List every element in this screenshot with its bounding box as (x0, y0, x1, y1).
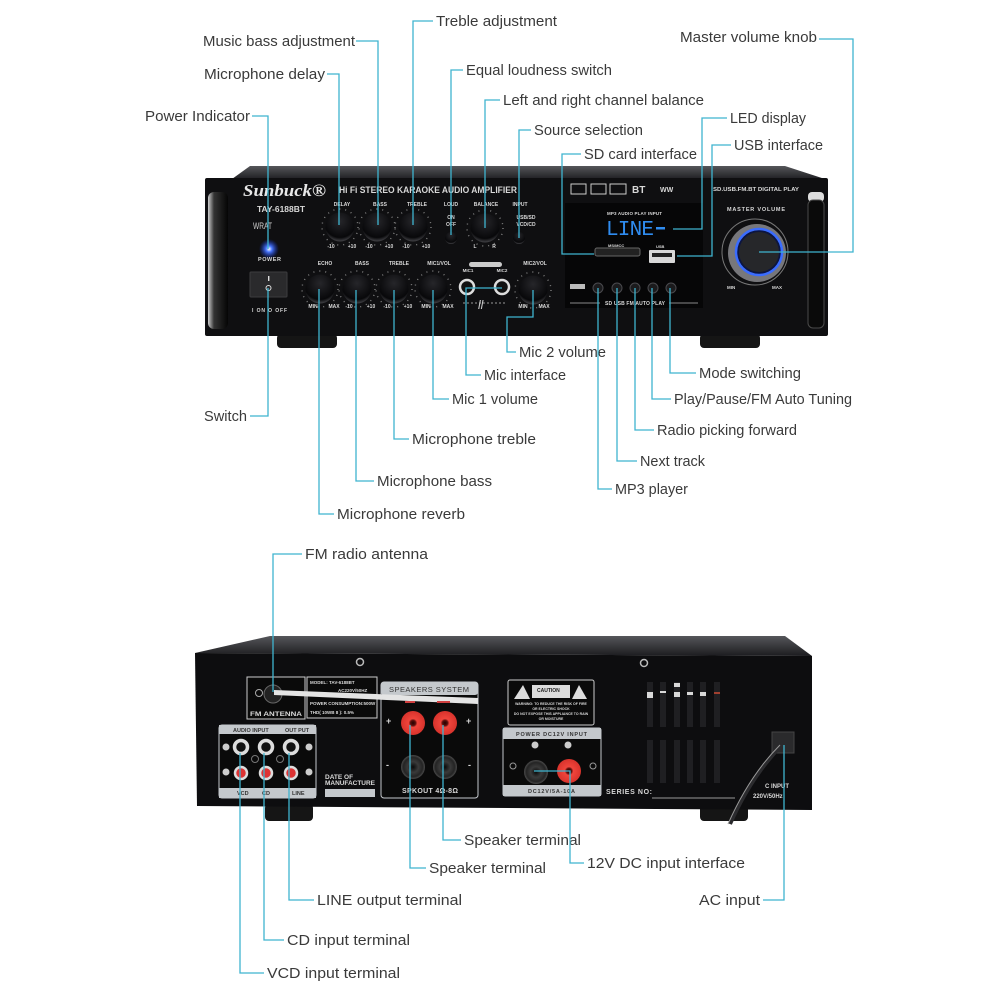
bottom row knobs: MIN (421, 304, 431, 310)
bottom row knobs: TREBLE (389, 261, 410, 267)
callout: VCD input terminal: VCD input terminal (267, 965, 400, 982)
rear face (195, 653, 812, 810)
callout: Microphone treble: Microphone treble (412, 431, 536, 448)
front face (205, 178, 828, 336)
rocker switch: I ON O OFF (252, 308, 287, 314)
SD slot: MS/MCC (608, 243, 624, 248)
media panel: MP3 AUDIO PLAY INPUT (607, 211, 662, 216)
callout: balance: Left and right channel balance (503, 92, 704, 109)
callout: LED display: LED display (730, 110, 806, 127)
feature icons: BT (632, 185, 645, 196)
date of manufacture (325, 774, 376, 797)
callout: 12V DC input interface: 12V DC input interface (587, 855, 745, 872)
callout: Speaker terminal lower: Speaker terminal (429, 860, 546, 877)
callout: Microphone delay: Microphone delay (204, 66, 326, 83)
audio input panel: AUDIO INPUT (233, 728, 269, 734)
bottom row knobs: MAX (538, 304, 550, 310)
callout: Microphone treble (394, 290, 536, 448)
media panel: SD USB FM AUTO PLAY (605, 301, 666, 307)
red terminals (401, 711, 457, 735)
specification panel (307, 677, 377, 718)
callout: Power Indicator (145, 108, 268, 249)
top row knobs: BALANCE (474, 202, 499, 208)
master volume knob: MAX (772, 285, 782, 290)
bottom row knobs (302, 261, 551, 310)
top row knobs: LOUD (444, 202, 458, 208)
callout: CD input terminal (264, 753, 410, 949)
speakers panel: SPKOUT 4Ω-8Ω (402, 788, 458, 795)
callout: Play/Pause/FM Auto Tuning (652, 288, 852, 408)
callout: Play/Pause/FM Auto Tuning: Play/Pause/FM Auto Tuning (674, 391, 852, 408)
top cover (232, 166, 828, 180)
WRAT logo: WRAT (253, 221, 272, 231)
callout: Music bass adjustment: Music bass adjustment (203, 33, 356, 50)
callout: Master volume knob: Master volume knob (680, 29, 817, 46)
callout: USB interface (677, 137, 823, 256)
callout: Speaker terminal lower (410, 725, 546, 877)
mic inputs: MIC1 (463, 268, 474, 273)
power indicator: POWER (258, 257, 281, 263)
callout: Music bass adjustment (203, 33, 378, 225)
mic inputs: ll (478, 298, 484, 312)
callout: USB interface: USB interface (734, 137, 823, 154)
antenna rod (274, 690, 478, 704)
callout: FM radio antenna: FM radio antenna (305, 546, 429, 563)
brand heading: Sunbuck® (243, 181, 326, 200)
RCA jacks (222, 740, 312, 779)
mic inputs (460, 262, 509, 312)
callout: Mic 2 volume: Mic 2 volume (519, 344, 606, 361)
specification panel: AC220V/50HZ (338, 688, 368, 693)
bottom row knobs: ECHO (318, 261, 332, 267)
DC power panel (503, 728, 601, 796)
DC power panel: POWER DC12V INPUT (516, 732, 588, 738)
callout: VCD input terminal (240, 753, 400, 982)
callout: Switch: Switch (204, 408, 247, 425)
LED display: LINE (606, 219, 654, 242)
bottom row knobs: MAX (328, 304, 340, 310)
callout: Microphone bass: Microphone bass (377, 473, 492, 490)
date of manufacture: MANUFACTURE (325, 780, 376, 787)
callout: Source selection (519, 122, 643, 238)
control buttons (570, 283, 676, 293)
AC input: 220V/50Hz (753, 794, 783, 800)
caution panel: OR ELECTRIC SHOCK (532, 707, 570, 711)
audio input panel: OUT PUT (285, 728, 310, 734)
caution panel (508, 680, 594, 725)
audio input panel (219, 725, 316, 798)
caution panel: CAUTION (537, 688, 560, 694)
USB port: USB (656, 244, 665, 249)
feet (277, 334, 760, 348)
specification panel: THD( 10WB 8 ): 0.5% (310, 710, 354, 715)
callout: LINE output terminal: LINE output terminal (317, 892, 462, 909)
black terminals (401, 755, 457, 779)
callout: Power Indicator: Power Indicator (145, 108, 250, 125)
master volume knob: MIN (727, 285, 735, 290)
callout: balance (485, 92, 704, 228)
bottom row knobs: BASS (355, 261, 370, 267)
callout: Speaker terminal upper (443, 725, 581, 849)
bottom row knobs: MIC2/VOL (523, 261, 547, 267)
audio input panel: VCD (237, 791, 249, 797)
rocker switch (250, 272, 287, 314)
callout: Treble adjustment: Treble adjustment (436, 13, 558, 30)
callout: Next track: Next track (640, 453, 705, 470)
callout: Master volume knob (680, 29, 853, 252)
speakers panel (381, 682, 478, 798)
top row knobs: +10 (348, 244, 356, 250)
callout: Mic 1 volume: Mic 1 volume (452, 391, 538, 408)
master volume knob: MASTER VOLUME (727, 207, 785, 213)
top row knobs: USB/SD (517, 215, 536, 221)
callout: Mic interface: Mic interface (484, 367, 566, 384)
specification panel: MODEL: TAV-6188BT (310, 680, 355, 685)
serial number (606, 789, 735, 798)
bottom row knobs: -10 (345, 304, 353, 310)
callout: Mode switching (670, 288, 801, 382)
callout: Source selection: Source selection (534, 122, 643, 139)
audio input panel: LINE (292, 791, 305, 797)
FM antenna panel: FM ANTENNA (250, 711, 302, 718)
caution panel: DO NOT EXPOSE THIS APPLIANCE TO RAIN (514, 712, 589, 716)
callout: Microphone delay (204, 66, 339, 225)
media panel (565, 203, 703, 308)
callout: Microphone reverb (319, 289, 465, 523)
top row knobs: INPUT (512, 202, 528, 208)
date of manufacture: DATE OF (325, 774, 353, 781)
FM antenna panel (247, 677, 305, 719)
callout: SD card interface: SD card interface (584, 146, 697, 163)
speakers panel: + (466, 716, 471, 726)
callout: Equal loudness switch (451, 62, 612, 235)
AC input (728, 732, 794, 824)
DC power panel: DC12V/5A-10A (528, 789, 575, 795)
rear feet (265, 804, 748, 821)
callout: Radio picking forward (635, 288, 797, 439)
master volume knob (722, 207, 788, 290)
specification panel: POWER CONSUMPTION:500W (310, 701, 376, 706)
AC input: C INPUT (765, 784, 789, 790)
callout: Microphone reverb: Microphone reverb (337, 506, 465, 523)
speakers panel: + (386, 716, 391, 726)
ventilation slots (647, 682, 720, 783)
rear amplifier (195, 636, 812, 824)
top row knobs: OFF (446, 222, 456, 228)
top row knobs (322, 202, 536, 250)
callout: Mic interface (466, 288, 566, 384)
callout: Equal loudness switch: Equal loudness switch (466, 62, 612, 79)
callout: Mic 1 volume (433, 290, 538, 408)
vent highlights (647, 683, 720, 698)
mic inputs: MIC2 (497, 268, 508, 273)
top row knobs: ON (447, 215, 455, 221)
callout: MP3 player (598, 288, 688, 498)
callout: CD input terminal: CD input terminal (287, 932, 410, 949)
bottom row knobs: +10 (367, 304, 375, 310)
rear top cover (195, 636, 812, 656)
feature icons (571, 184, 799, 196)
caution panel: WARNING: TO REDUCE THE RISK OF FIRE (515, 702, 588, 706)
feature icons: SD.USB.FM.BT DIGITAL PLAY (713, 187, 799, 193)
top row knobs: +10 (422, 244, 430, 250)
bottom row knobs: MIN (518, 304, 528, 310)
callout: Switch (204, 288, 268, 425)
top row knobs: DELAY (334, 202, 351, 208)
power indicator (258, 239, 281, 263)
callout: MP3 player: MP3 player (615, 481, 688, 498)
callout: LED display (673, 110, 806, 229)
speakers panel: SPEAKERS SYSTEM (389, 685, 469, 694)
top row knobs: -10 (402, 244, 410, 250)
top row knobs: TREBLE (407, 202, 428, 208)
top row knobs: R (492, 244, 496, 250)
model: TAY-6188BT (257, 205, 305, 214)
speakers panel: - (468, 760, 471, 770)
callout: Mode switching: Mode switching (699, 365, 801, 382)
top row knobs: BASS (373, 202, 388, 208)
callout: AC input (699, 745, 784, 909)
handles (208, 192, 824, 329)
audio input panel: CD (262, 791, 270, 797)
speakers panel: - (386, 760, 389, 770)
bottom row knobs: MAX (442, 304, 454, 310)
front amplifier (205, 166, 828, 348)
callout: FM radio antenna (273, 546, 429, 692)
callout: Microphone bass (356, 290, 492, 490)
bottom row knobs: MIN (308, 304, 318, 310)
callout: AC input: AC input (699, 892, 761, 909)
callout: Radio picking forward: Radio picking forward (657, 422, 797, 439)
top row knobs: +10 (385, 244, 393, 250)
top row knobs: VCD/CD (516, 222, 536, 228)
bottom row knobs: MIC1/VOL (427, 261, 451, 267)
product title: Hi Fi STEREO KARAOKE AUDIO AMPLIFIER (339, 185, 517, 195)
serial number: SERIES NO: (606, 789, 652, 796)
top row knobs: L (473, 244, 477, 250)
callout: LINE output terminal (289, 753, 462, 909)
callout: Treble adjustment (413, 13, 558, 225)
screws (356, 658, 648, 666)
bottom row knobs: -10 (383, 304, 391, 310)
top row knobs: -10 (327, 244, 335, 250)
top row knobs: -10 (365, 244, 373, 250)
caution panel: OR MOISTURE (539, 717, 564, 721)
callout: SD card interface (562, 146, 697, 254)
callout: Speaker terminal upper: Speaker terminal (464, 832, 581, 849)
feature icons: WW (660, 187, 674, 194)
callout: Next track (617, 288, 705, 470)
callout: Mic 2 volume (507, 290, 606, 361)
callout: 12V DC input interface (534, 771, 745, 872)
bottom row knobs: +10 (404, 304, 412, 310)
